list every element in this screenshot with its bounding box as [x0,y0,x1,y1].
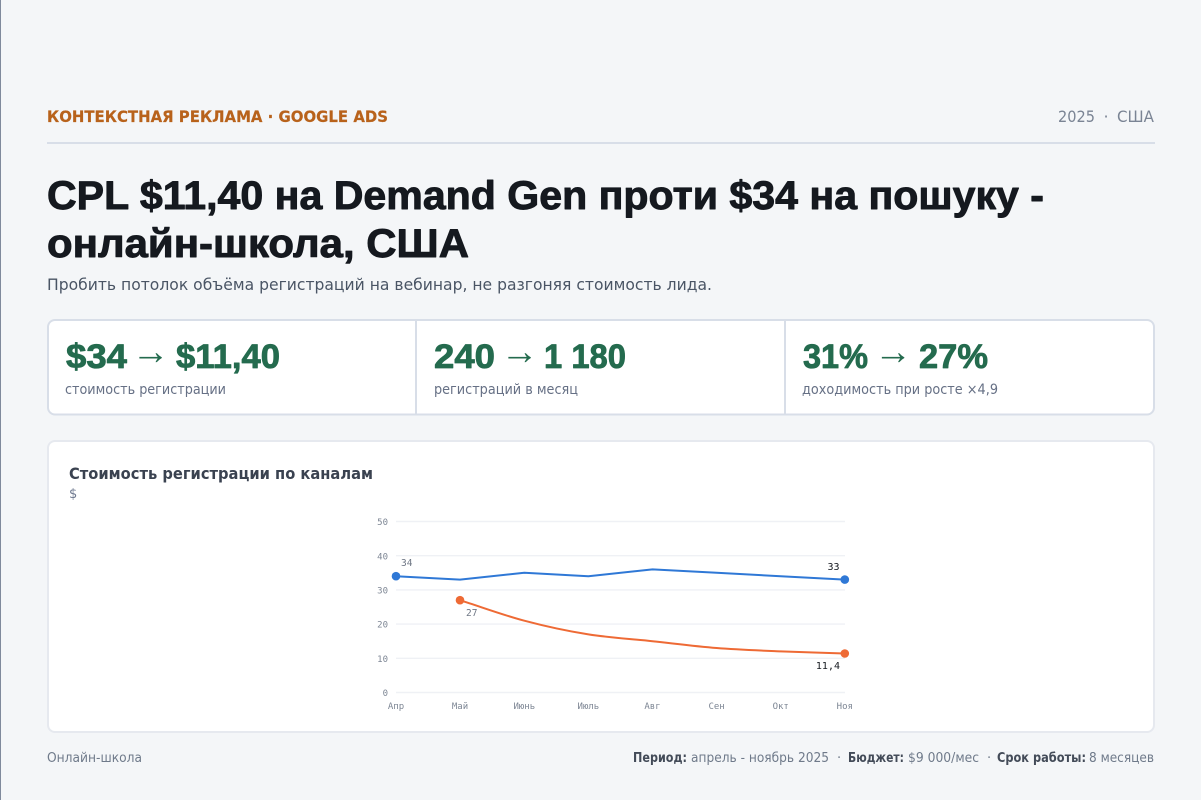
footer: project details: Период: [633,751,687,766]
y axis labels [377,518,388,699]
KPI: registrations per month: 1 180 [544,338,626,376]
y axis labels: 10 [377,655,388,665]
y axis labels: 20 [377,620,388,630]
y axis labels: 30 [377,586,388,596]
y axis labels: 0 [383,689,388,699]
KPI: registration cost: $34 [66,338,127,376]
title: онлайн-школа, США [47,222,469,266]
KPI: registrations per month: регистраций в месяц [434,382,578,398]
KPI: registration cost: → [132,331,170,373]
KPI: profitability: доходимость при росте ×4,9 [802,382,998,398]
x axis labels: Окт [773,702,789,712]
y axis labels: 50 [377,518,388,528]
chart heading: Стоимость регистрации по каналам [69,464,373,483]
series: orange line [456,596,849,672]
x axis labels: Май [452,702,468,712]
title: CPL $11,40 на Demand Gen проти $34 на пошуку - [47,174,1044,218]
panel: chart [48,441,1154,732]
header eyebrow: КОНТЕКСТНАЯ РЕКЛАМА · GOOGLE ADS [47,107,388,126]
x axis labels: Авг [644,702,661,712]
KPI: profitability [802,331,998,398]
y axis labels: 40 [377,552,388,562]
KPI: profitability: 27% [919,338,988,376]
KPI: registrations per month: → [500,331,538,373]
footer: project details: Бюджет: [848,751,904,766]
footer: project details: · [987,751,991,766]
header year and country [1058,107,1154,126]
x axis labels: Ноя [837,702,853,712]
x axis labels: Апр [388,702,404,712]
x axis labels: Июль [578,702,599,712]
KPI: registrations per month: 240 [434,338,495,376]
series: blue line: 34 [401,558,413,569]
x axis labels [388,702,853,712]
footer: project details: $9 000/мес [908,751,979,766]
footer: project details: апрель - ноябрь 2025 [691,751,829,766]
KPI: registration cost: $11,40 [176,338,280,376]
series: blue line [392,558,849,584]
header year and country: · [1104,107,1109,126]
x axis labels: Июнь [513,702,535,712]
footer: client: Онлайн-школа [47,751,142,766]
footer: project details [633,751,1154,766]
header year and country: 2025 [1058,107,1095,126]
series: orange line: 27 [466,608,477,619]
KPI: profitability: → [874,331,912,373]
title [47,174,1044,266]
line chart [377,518,853,712]
KPI: registration cost [65,331,280,398]
series: blue line: 33 [827,562,840,573]
footer: project details: Срок работы: [997,751,1086,766]
x axis labels: Сен [708,702,725,712]
KPI: profitability: 31% [803,338,868,376]
footer: project details: · [837,751,841,766]
subtitle: Пробить потолок объёма регистраций на вебинар, не разгоняя стоимость лида. [47,275,712,294]
chart unit: $ [69,487,77,502]
panel: KPI strip [48,320,1154,414]
header year and country: США [1117,107,1154,126]
footer: project details: 8 месяцев [1089,751,1154,766]
KPI: registrations per month [434,331,626,398]
KPI: registration cost: стоимость регистрации [65,382,226,398]
series: orange line: 11,4 [816,661,840,672]
